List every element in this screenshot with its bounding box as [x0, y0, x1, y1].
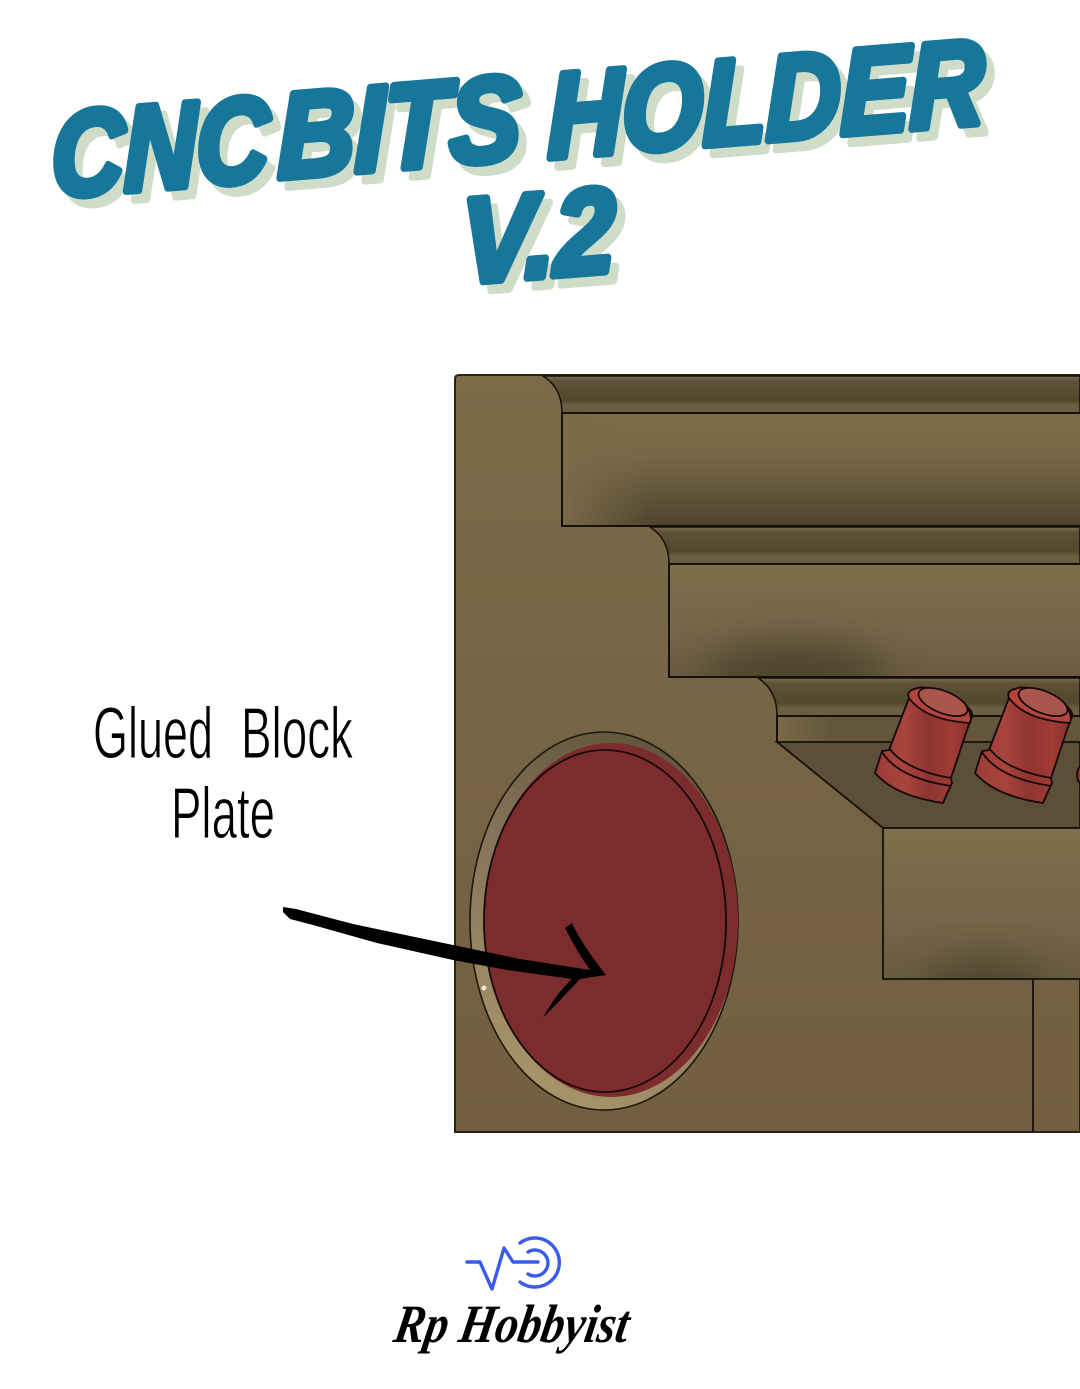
- title line 1: CNC BITS HOLDER: BITS: [277, 50, 521, 204]
- title shadow: CNC: [59, 80, 279, 232]
- title line 2: V.2: V.2: [461, 163, 616, 309]
- middle tier: [648, 527, 1080, 678]
- logo wordmark: Rp Hobbyist: [389, 1294, 636, 1354]
- title shadow: V.2: [469, 172, 624, 318]
- holder body: [455, 375, 1080, 1132]
- arrow: [283, 907, 606, 1018]
- red knob 1: [875, 682, 972, 803]
- title: [51, 15, 993, 318]
- glued block plate: [470, 732, 738, 1110]
- upper tier: [543, 376, 1080, 526]
- label: Glued Block Plate: Block: [241, 694, 354, 774]
- red knob 2: [975, 682, 1072, 803]
- label: Glued Block Plate: Plate: [171, 774, 275, 854]
- front block: [883, 828, 1080, 1132]
- title line 1: CNC BITS HOLDER: CNC: [51, 71, 271, 223]
- title line 1: CNC BITS HOLDER: [51, 15, 985, 223]
- icon: pulse and circle mark: [467, 1238, 559, 1289]
- logo: [389, 1238, 636, 1354]
- panel: CAD render of bits holder: [455, 375, 1080, 1132]
- title shadow: [59, 24, 993, 318]
- red knob 3 edge: [1077, 764, 1080, 786]
- title shadow: HOLDER: [555, 24, 993, 193]
- title line 1: CNC BITS HOLDER: HOLDER: [547, 15, 985, 184]
- lower tier: [758, 678, 1080, 828]
- title shadow: BITS: [285, 59, 529, 213]
- label: Glued Block Plate: Glued: [93, 694, 213, 774]
- label: Glued Block Plate: [93, 694, 354, 854]
